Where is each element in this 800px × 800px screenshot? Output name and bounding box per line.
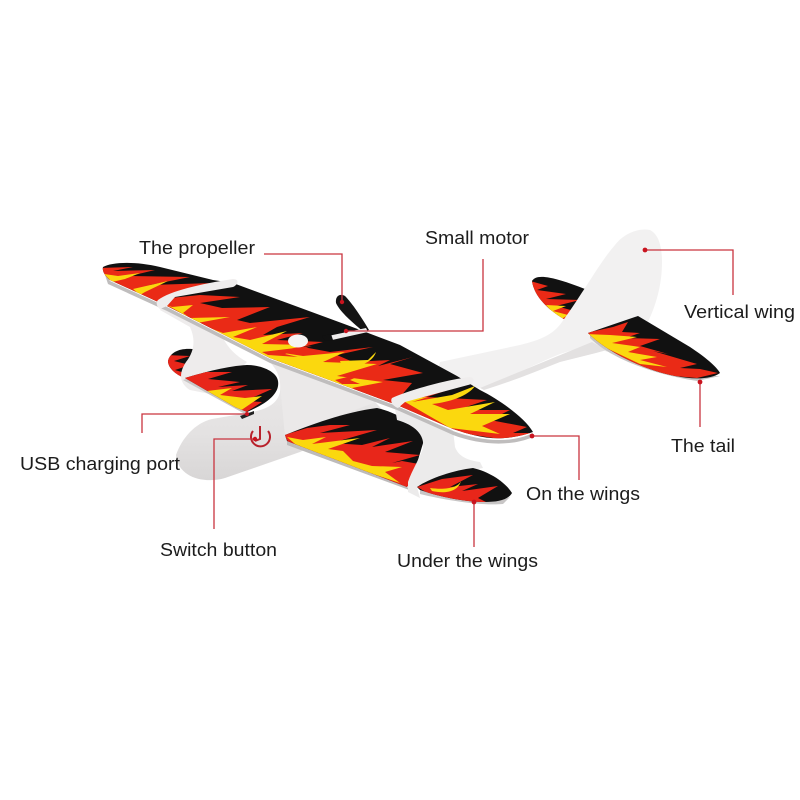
label: propeller: The propeller: [139, 238, 255, 258]
label: small motor: Small motor: [425, 228, 529, 248]
label: vertical wing: Vertical wing: [684, 302, 795, 322]
leader: propeller: [264, 254, 344, 304]
leader: vertical wing: [643, 248, 733, 295]
label: under the wings: Under the wings: [397, 551, 538, 571]
leader: switch button: [214, 437, 257, 529]
power switch icon: [251, 426, 270, 446]
leader: small motor: [344, 259, 483, 333]
top wing: [100, 263, 540, 445]
wing dome: [288, 334, 308, 348]
fuselage boom and vertical fin: [430, 230, 662, 400]
infographic: plane diagram: [22, 230, 794, 571]
left strut from top wing: [160, 305, 247, 395]
yellow flames: [104, 273, 383, 402]
leader: USB port: [142, 412, 249, 433]
USB port: [240, 411, 254, 419]
nose and central plate: [176, 362, 385, 480]
right tail wing: [586, 316, 720, 381]
label: switch button: Switch button: [160, 540, 277, 560]
label: on the wings: On the wings: [526, 484, 640, 504]
label: USB charging port: USB charging port: [20, 454, 180, 474]
inner left lower wing: [183, 365, 278, 416]
under wing tip: [417, 468, 512, 504]
plane illustration: [100, 230, 720, 504]
label: tail: The tail: [671, 436, 735, 456]
left tail wing: [532, 276, 584, 320]
red flames: [100, 267, 540, 445]
propeller and motor: [322, 295, 369, 341]
leader: on the wings: [530, 434, 579, 480]
strut to under wing: [395, 408, 483, 498]
right lower wing: [284, 408, 430, 491]
white strut caps on top wing: [157, 279, 474, 408]
red slivers over yellow: [262, 346, 368, 384]
leader: tail: [698, 380, 702, 427]
top wing underside edge: [103, 269, 533, 444]
far left lower wing: [168, 348, 192, 376]
leader: under the wings: [472, 500, 476, 547]
